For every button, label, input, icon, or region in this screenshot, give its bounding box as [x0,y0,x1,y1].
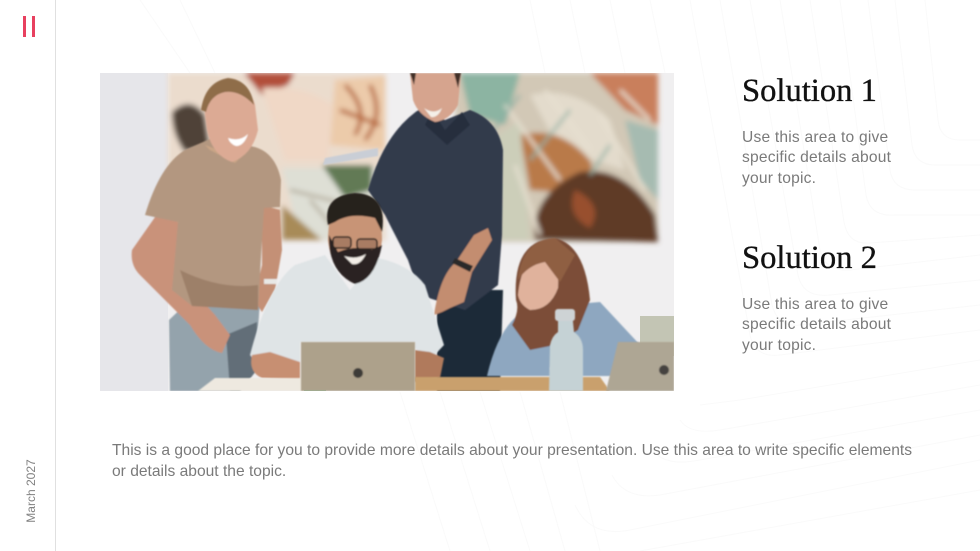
text: Solution 1 details: your topic. [742,170,816,187]
text: Solution 2 details: your topic. [742,337,816,354]
man standing [368,73,503,391]
text: Solution 1 details: Use this area to give [742,129,888,146]
right painting [455,73,658,242]
text: Solution 2 details [742,296,891,354]
photo: team gathered around laptops [100,73,674,391]
text: Solution 1 details [742,129,891,187]
man seated [250,193,444,382]
text: presentation details: or details about the topic. [112,463,286,480]
heading: Solution 1: Solution 1 [742,73,877,109]
table and papers [415,377,610,391]
text: Solution 2 details: Use this area to give [742,296,888,313]
date label: March 2027 [24,459,38,523]
text: Solution 2 details: specific details about [742,316,891,333]
text: presentation details [112,442,912,480]
sidebar divider [54,0,56,551]
text: presentation details: This is a good place for you to provide more details about your presentation. Use this area to write specific elements [112,442,912,459]
icon: red pause bars logo [23,16,35,37]
wall [168,73,674,391]
left painting [168,73,386,241]
man left [132,78,282,391]
laptops [301,342,674,391]
heading: Solution 2: Solution 2 [742,240,877,276]
water bottle [549,309,583,391]
woman [486,238,638,377]
text: Solution 1 details: specific details about [742,149,891,166]
